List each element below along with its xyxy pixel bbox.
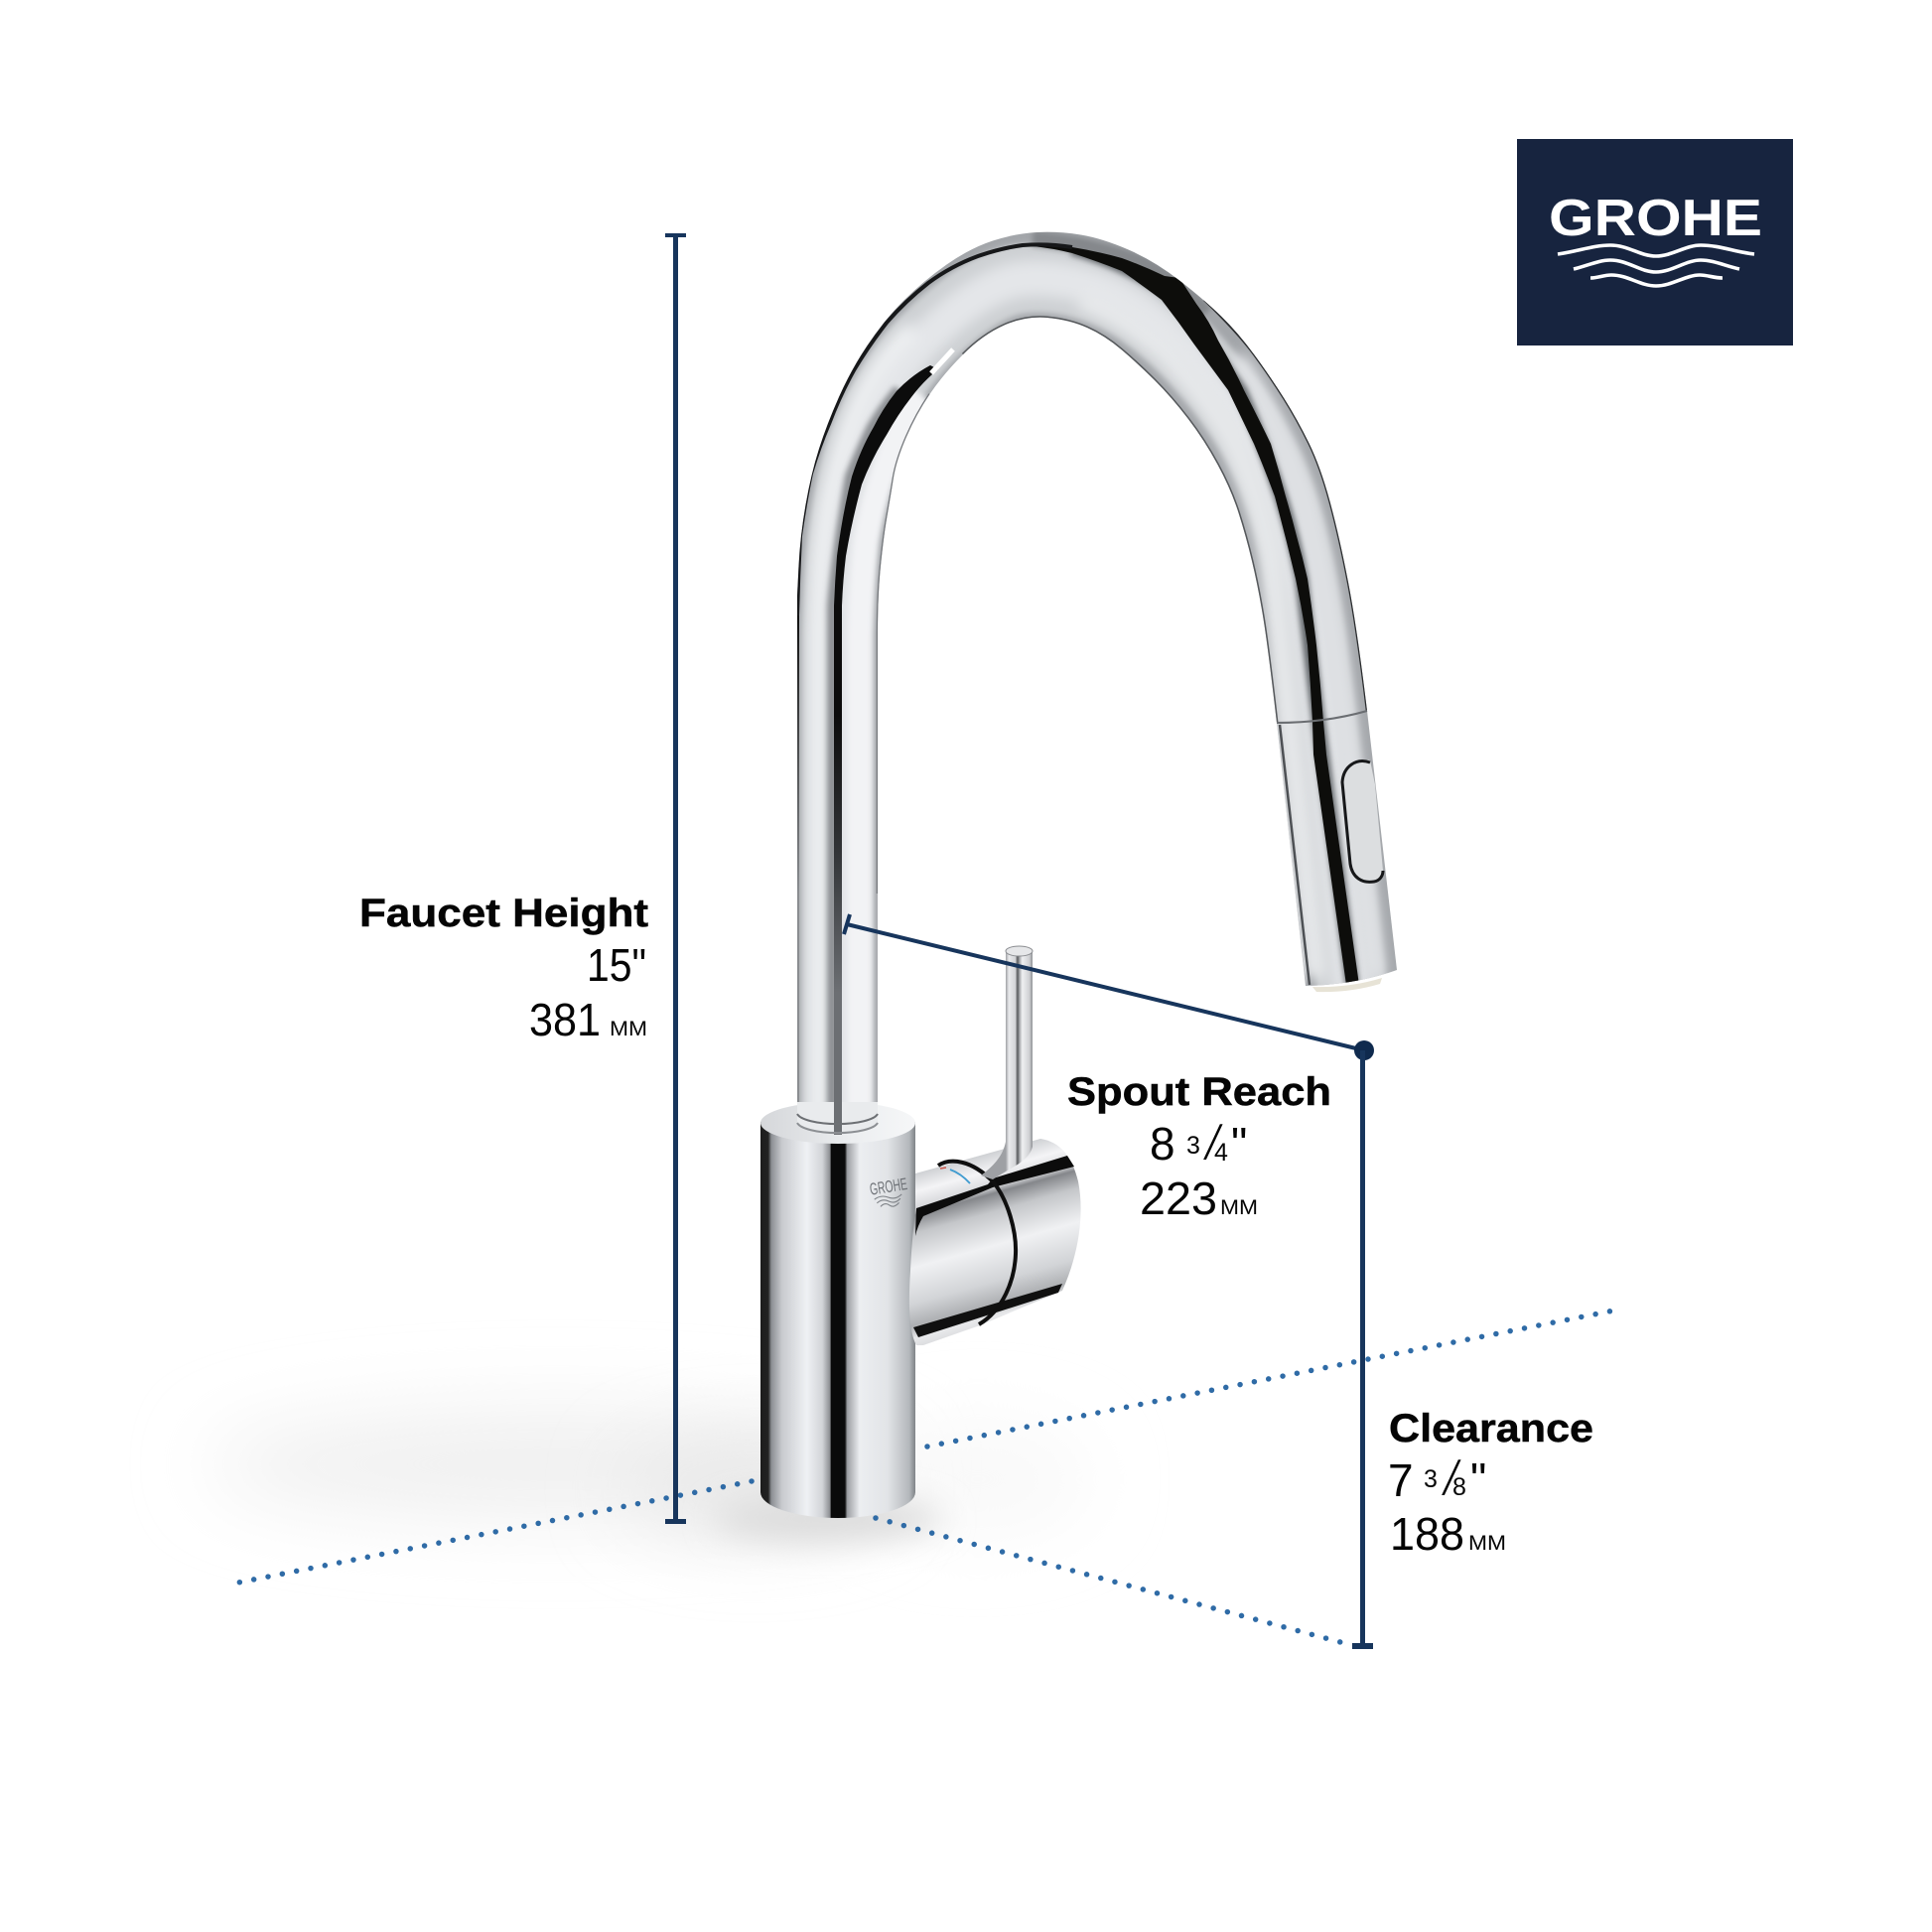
logo waves [1558,245,1754,286]
gray patch above right band [1033,238,1206,313]
head seam [1277,711,1367,723]
label: spout reach [1067,1070,1331,1224]
GROHE logo [1517,139,1793,345]
inner side light strip on right of tube [1082,298,1315,978]
red mark [940,1168,946,1169]
faucet height dimension line [665,233,686,1524]
label: spout reach: ⁄ [1203,1114,1223,1172]
mixer lower dark band [913,1284,1062,1337]
inner edge line [963,318,1277,723]
label: clearance: " [1470,1453,1486,1505]
faucet spout tube [797,232,1397,1102]
spout reach dimension line [844,914,1374,1060]
outer side light strip on right of tube [1235,359,1375,978]
right dark band [1033,245,1359,985]
spray outlet [1312,978,1382,992]
clearance dimension line [1352,1050,1373,1649]
halo beside left band [832,389,898,1132]
label: clearance: 8 [1452,1473,1466,1501]
lower outer edge of tube [797,616,799,1102]
left dark band [834,365,938,1132]
small GROHE logo on base: GROHE [869,1174,908,1199]
base top face [760,1102,915,1144]
left light strip of tube [817,330,913,1132]
label: clearance: ⁄ [1442,1449,1461,1507]
halo beside right band [1072,248,1352,985]
dark reflection along outer arc [797,244,1072,616]
mixer ring [938,1162,1016,1324]
lever handle [981,946,1033,1179]
faucet [760,208,1420,1518]
inner strip of tube [860,395,921,1132]
logo wordmark: GROHE [1549,190,1762,247]
blue mark [950,1170,970,1183]
base cylinder [760,1100,915,1518]
label: clearance: Clearance [1389,1407,1593,1450]
label: clearance: 3 [1424,1465,1438,1493]
label: spout reach: 223 [1140,1173,1217,1224]
head left edge [1280,725,1310,985]
head button [1342,759,1383,882]
tube lower portion over the top face [797,1102,878,1133]
label: spout reach: 3 [1186,1132,1200,1160]
label: spout reach: 8 [1150,1118,1175,1170]
inner left edge line [878,394,929,894]
spray head details [1277,711,1383,992]
label: faucet height: 15" [587,939,646,991]
mixer upper dark band [915,1156,1074,1236]
label: spout reach: MM [1220,1196,1258,1219]
label: clearance: 188 [1390,1508,1464,1560]
label: clearance [1388,1407,1593,1560]
right outer edge line [1204,300,1367,711]
label: clearance: 7 [1388,1454,1414,1506]
label: clearance: MM [1468,1532,1506,1555]
label: spout reach: " [1231,1118,1247,1170]
label: faucet height: MM [610,1018,647,1040]
floor shadow [208,1410,1087,1541]
label: spout reach: Spout Reach [1067,1070,1331,1114]
label: spout reach: 4 [1214,1139,1228,1167]
label: faucet height [359,892,648,1045]
inner glint [931,349,953,373]
label: faucet height: 381 [529,994,601,1045]
mixer body [909,1139,1081,1345]
label: faucet height: Faucet Height [359,892,648,935]
dotted floor lines [238,1311,1616,1642]
small GROHE logo on base [869,1174,910,1209]
